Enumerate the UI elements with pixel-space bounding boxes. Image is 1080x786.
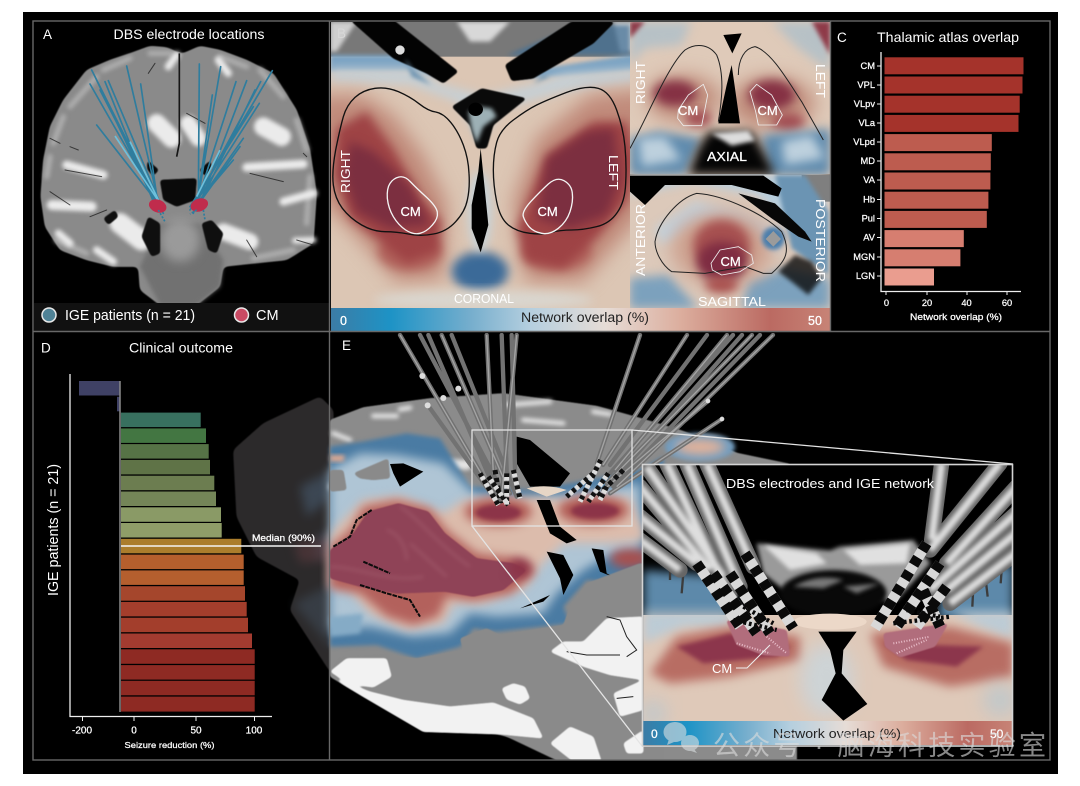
bar chart: seizure reduction: Seizure reduction (%) bbox=[124, 740, 215, 750]
bar chart: CM bbox=[861, 61, 875, 71]
panel B: coronal network overlap bbox=[331, 22, 630, 308]
bar chart: 60 bbox=[1002, 298, 1012, 308]
inset title: DBS electrodes and IGE network bbox=[726, 476, 935, 491]
title: DBS electrode locations: DBS electrode locations bbox=[114, 27, 265, 42]
bar chart: 40 bbox=[961, 298, 972, 308]
bar chart: Pul bbox=[862, 214, 875, 224]
bar chart: AV bbox=[863, 232, 876, 242]
panel E: brain slab with electrodes and inset bbox=[233, 335, 1013, 763]
brain slab image bbox=[233, 335, 797, 763]
median marker: Median (90%) bbox=[252, 533, 315, 543]
orientation labels coronal: LEFT bbox=[606, 155, 621, 190]
orientation labels axial: CM bbox=[758, 103, 778, 118]
bar chart: seizure reduction: 50 bbox=[190, 726, 202, 736]
panel A: DBS electrode locations bbox=[34, 22, 329, 331]
bar chart: 20 bbox=[922, 298, 932, 308]
bar chart bbox=[853, 52, 1024, 322]
watermark text: 公众号 · 脑海科技实验室 bbox=[713, 731, 1046, 761]
bar chart: VLpd bbox=[853, 137, 875, 147]
CM callout: CM bbox=[712, 661, 732, 676]
orientation labels coronal: CM bbox=[538, 204, 558, 219]
panel B: sagittal slice bbox=[630, 174, 830, 309]
orientation labels axial: LEFT bbox=[813, 64, 828, 98]
orientation labels coronal: CORONAL bbox=[454, 292, 514, 306]
inset colorbar labels: 50 bbox=[990, 727, 1004, 741]
colorbar: network overlap: 50 bbox=[808, 314, 822, 328]
panel letter E: E bbox=[342, 338, 351, 353]
panel letter B: B bbox=[337, 26, 346, 41]
zoom box and leader lines bbox=[472, 430, 1013, 746]
bar chart: Hb bbox=[863, 194, 875, 204]
legend: IGE patients (n = 21) bbox=[65, 308, 195, 324]
CM callout bbox=[712, 645, 770, 676]
bar chart: VLa bbox=[858, 118, 876, 128]
orientation labels axial: AXIAL bbox=[707, 149, 747, 164]
coronal brain with electrodes bbox=[41, 46, 317, 305]
colorbar: network overlap: Network overlap (%) bbox=[521, 310, 649, 325]
orientation labels sagittal: CM bbox=[720, 254, 741, 269]
title: Clinical outcome: Clinical outcome bbox=[129, 340, 233, 356]
orientation labels sagittal bbox=[633, 199, 828, 309]
panel B: axial slice bbox=[630, 22, 830, 175]
panel letter D: D bbox=[41, 340, 51, 356]
icon: chat bubbles bbox=[664, 722, 699, 753]
bar chart: MGN bbox=[853, 252, 875, 262]
legend bbox=[34, 303, 329, 331]
bar chart: VPL bbox=[857, 80, 875, 90]
panel letter C: C bbox=[837, 30, 847, 45]
bar chart: VLpv bbox=[854, 99, 875, 109]
orientation labels coronal: CM bbox=[400, 204, 421, 219]
watermark bbox=[664, 722, 1046, 761]
title: Thalamic atlas overlap: Thalamic atlas overlap bbox=[877, 29, 1019, 45]
orientation labels coronal bbox=[338, 150, 621, 306]
bar chart: 0 bbox=[884, 298, 889, 308]
bar chart: Network overlap (%) bbox=[910, 312, 1002, 322]
inset colorbar labels: Network overlap (%) bbox=[773, 727, 901, 741]
inset colorbar labels: 0 bbox=[651, 727, 658, 741]
inset colorbar labels bbox=[651, 727, 1004, 741]
orientation labels sagittal: ANTERIOR bbox=[633, 204, 648, 276]
panel letter A: A bbox=[43, 27, 52, 42]
panel C: thalamic atlas overlap bbox=[837, 29, 1024, 322]
bar chart: seizure reduction bbox=[70, 374, 272, 750]
inset colorbar bbox=[643, 721, 1012, 746]
colorbar: network overlap bbox=[331, 308, 830, 331]
orientation labels coronal: RIGHT bbox=[338, 150, 353, 193]
bar chart: seizure reduction: -200 bbox=[72, 726, 92, 736]
bar chart: MD bbox=[861, 156, 875, 166]
bar chart: LGN bbox=[856, 271, 875, 281]
legend: CM bbox=[256, 308, 279, 324]
bar chart: seizure reduction: 100 bbox=[246, 726, 263, 736]
panel D: clinical outcome bbox=[41, 340, 321, 750]
bar chart: VA bbox=[863, 175, 876, 185]
orientation labels axial: RIGHT bbox=[633, 61, 648, 104]
y-axis label: IGE patients (n = 21) bbox=[46, 464, 62, 596]
orientation labels sagittal: POSTERIOR bbox=[813, 199, 828, 282]
inset: DBS electrodes and IGE network bbox=[640, 463, 1020, 746]
orientation labels sagittal: SAGITTAL bbox=[698, 294, 766, 309]
coronal slice bbox=[331, 22, 630, 308]
orientation labels axial bbox=[633, 61, 828, 164]
colorbar: network overlap: 0 bbox=[340, 314, 347, 328]
bar chart: seizure reduction: 0 bbox=[131, 726, 137, 736]
orientation labels axial: CM bbox=[678, 103, 698, 118]
